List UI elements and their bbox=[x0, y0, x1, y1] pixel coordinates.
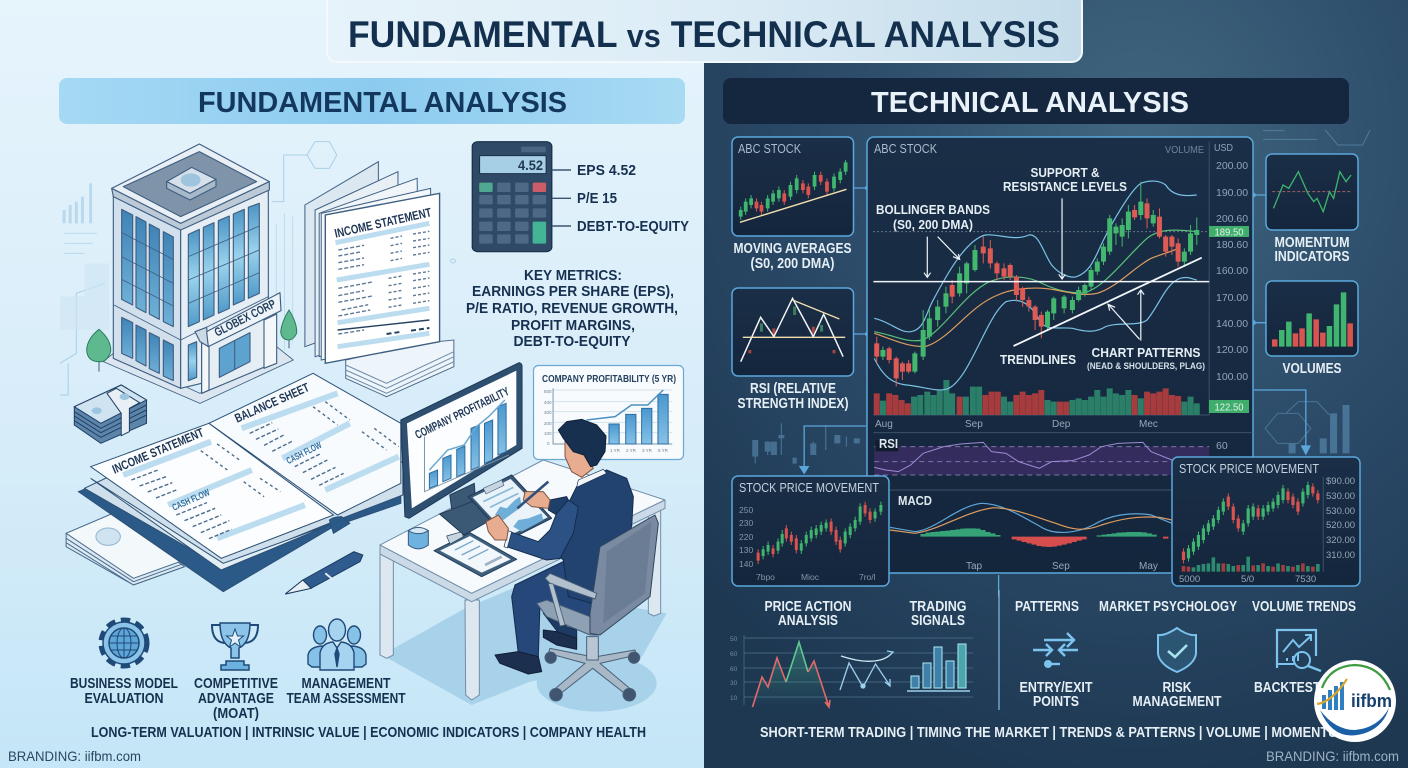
label: moving averages: (S0, 200 DMA) bbox=[750, 256, 835, 272]
head and shoulders pattern bbox=[741, 298, 845, 362]
card: company profitability 5 yr chart bbox=[534, 366, 684, 460]
label: market psychology: MARKET PSYCHOLOGY bbox=[1099, 598, 1237, 615]
bollinger bands bbox=[874, 181, 1197, 332]
icon: calculator bbox=[472, 142, 571, 252]
illustration: desktop monitor with profitability chart bbox=[401, 363, 522, 535]
card title: COMPANY PROFITABILITY (5 YR) bbox=[542, 373, 676, 385]
text block: key metrics bbox=[466, 267, 678, 350]
label: price action analysis: ANALYSIS bbox=[778, 612, 838, 629]
month axis labels: Aug bbox=[875, 419, 893, 430]
chair armrest bbox=[545, 573, 597, 599]
label: entry/exit points bbox=[1020, 679, 1092, 710]
axis labels: 7ro/l bbox=[859, 572, 876, 582]
volume and USD labels: VOLUME bbox=[1165, 144, 1204, 156]
text block: key metrics: EARNINGS PER SHARE (EPS), bbox=[472, 283, 674, 300]
label: RSI relative strength index bbox=[738, 381, 849, 412]
chart: price action line bbox=[730, 635, 973, 707]
price axis: 140.00 bbox=[1216, 318, 1248, 330]
text block: key metrics: PROFIT MARGINS, bbox=[511, 317, 635, 334]
card axis labels: 5 YR bbox=[658, 448, 669, 453]
price axis: 120.00 bbox=[1216, 344, 1248, 356]
label: entry/exit points: POINTS bbox=[1033, 693, 1079, 710]
floor shadow under desk and chair bbox=[382, 587, 667, 712]
background decoration: technical panel faded candles and hexagons bbox=[755, 130, 1370, 463]
illustration: analyst seated in office chair bbox=[468, 419, 658, 701]
text block: key metrics: KEY METRICS: bbox=[524, 267, 622, 284]
background decoration: faded bars and hexagon, left bbox=[60, 142, 456, 395]
RSI label: RSI bbox=[879, 436, 898, 451]
label: risk management: MANAGEMENT bbox=[1132, 693, 1222, 710]
metric: debt to equity: DEBT-TO-EQUITY bbox=[577, 218, 689, 235]
card axis labels: 400 bbox=[544, 400, 552, 405]
month axis labels: Sep bbox=[965, 419, 983, 430]
RSI band bbox=[874, 447, 1209, 475]
windows, left face bbox=[122, 209, 173, 381]
candle bodies bbox=[883, 202, 1197, 372]
chair base bbox=[545, 637, 640, 701]
icon: backtest chart and magnifier bbox=[1277, 630, 1321, 671]
annotation: chart patterns: (NEAD & SHOULDERS, PLAG) bbox=[1087, 361, 1205, 372]
support, dotted and trend lines bbox=[873, 281, 1209, 283]
label: trading signals: TRADING bbox=[910, 598, 966, 615]
label: trading signals: SIGNALS bbox=[911, 612, 965, 629]
chart: price action line: 30 bbox=[730, 680, 738, 687]
illustration: paper stack under income statement bbox=[346, 340, 454, 397]
illustration: income statement report bbox=[305, 162, 440, 363]
axis labels: $90.00 bbox=[1326, 476, 1355, 487]
price axis: 180.60 bbox=[1216, 239, 1248, 251]
axis labels: 130 bbox=[739, 545, 753, 555]
label: competitive advantage moat: ADVANTAGE bbox=[198, 690, 274, 707]
chart panel: RSI head and shoulders bbox=[732, 288, 854, 376]
card axis labels: 200 bbox=[544, 421, 552, 426]
label: moving averages bbox=[734, 241, 852, 272]
illustration: desk clipboard and glass bbox=[408, 527, 517, 577]
candle wicks bbox=[883, 182, 1197, 373]
month axis labels: Dep bbox=[1052, 419, 1071, 430]
card axis labels: 300 bbox=[544, 410, 552, 415]
axis labels: 320.00 bbox=[1326, 535, 1355, 546]
panel title: STOCK PRICE MOVEMENT bbox=[1179, 462, 1319, 476]
chart panel: stock price movement left bbox=[732, 476, 889, 586]
logo: iifbm: iifbm bbox=[1351, 691, 1392, 711]
icon: business model gear and globe bbox=[103, 622, 145, 664]
label: monitor chart title: COMPANY PROFITABILITY bbox=[413, 384, 511, 442]
chart panel: moving averages bbox=[732, 137, 854, 236]
label: volumes: VOLUMES bbox=[1282, 361, 1342, 377]
main chart label: ABC STOCK bbox=[874, 142, 938, 156]
panel: fundamental analysis background bbox=[0, 0, 704, 768]
mini candles and volume bbox=[1184, 477, 1323, 572]
label: competitive advantage moat: COMPETITIVE bbox=[194, 675, 278, 692]
chart panel: main ABC stock chart: USD bbox=[1214, 142, 1233, 154]
panel: technical analysis background bbox=[704, 0, 1408, 768]
neck and face bbox=[565, 440, 593, 477]
annotation: trendlines: TRENDLINES bbox=[1000, 352, 1076, 367]
icon: risk management shield bbox=[1158, 628, 1196, 672]
axis labels: 520.00 bbox=[1326, 520, 1355, 531]
label: book balance sheet: BALANCE SHEET bbox=[233, 380, 312, 426]
label: momentum indicators bbox=[1274, 235, 1350, 265]
annotation: bollinger bands bbox=[876, 202, 990, 232]
axis labels: 530.00 bbox=[1326, 506, 1355, 517]
tablet bbox=[468, 475, 552, 540]
label: Globex Corp sign: GLOBEX CORP bbox=[212, 297, 278, 339]
RSI axis value: 60 bbox=[1216, 440, 1228, 452]
icon: management team bbox=[308, 619, 366, 670]
label: patterns: PATTERNS bbox=[1015, 598, 1079, 615]
panel label: ABC STOCK bbox=[738, 142, 802, 156]
label: trading signals bbox=[910, 598, 966, 629]
axis labels: 230 bbox=[739, 518, 753, 528]
annotation: bollinger bands: (S0, 200 DMA) bbox=[893, 217, 973, 232]
mini candles bbox=[758, 502, 881, 564]
icon: pen bbox=[285, 552, 363, 594]
header: fundamental analysis bbox=[59, 78, 685, 124]
card axis labels: 100 bbox=[544, 431, 552, 436]
text block: key metrics: DEBT-TO-EQUITY bbox=[514, 333, 630, 350]
chart panel: momentum indicators bbox=[1266, 154, 1358, 230]
icon: entry/exit arrows bbox=[1033, 633, 1078, 668]
label: risk management bbox=[1132, 679, 1222, 710]
chart panel: volumes bbox=[1266, 281, 1358, 356]
illustration: paper stack bottom left bbox=[66, 513, 184, 585]
title bbox=[327, 0, 1082, 62]
chart: price action line: 60 bbox=[730, 666, 738, 673]
label: volume trends: VOLUME TRENDS bbox=[1252, 598, 1356, 615]
card axis labels: 3 YR bbox=[642, 448, 653, 453]
metric: EPS: EPS 4.52 bbox=[577, 162, 636, 179]
annotation: support and resistance: SUPPORT & bbox=[1030, 165, 1100, 180]
MACD lines and histogram bbox=[890, 503, 1172, 532]
building entrance bbox=[202, 310, 273, 393]
annotation: support and resistance: RESISTANCE LEVELS bbox=[1003, 179, 1127, 194]
label: business model evaluation: EVALUATION bbox=[84, 690, 164, 707]
axis labels: 220 bbox=[739, 532, 753, 542]
connector lines between technical panels bbox=[800, 186, 1310, 597]
label: management team assessment bbox=[286, 675, 406, 707]
price axis: 170.00 bbox=[1216, 292, 1248, 304]
green price tag 122.50: 122.50 bbox=[1214, 402, 1244, 414]
windows, right face bbox=[188, 203, 259, 381]
divider: technical bottom section bbox=[998, 590, 1000, 710]
chart: signal bars bbox=[907, 644, 970, 691]
illustration: Globex Corp office building bbox=[103, 144, 293, 403]
chart panel: stock price movement right bbox=[1172, 457, 1360, 586]
text block: key metrics: P/E RATIO, REVENUE GROWTH, bbox=[466, 300, 678, 317]
axis labels: 5000 bbox=[1179, 574, 1200, 585]
label: backtesting: BACKTESTING bbox=[1254, 679, 1342, 696]
axis labels bbox=[739, 505, 876, 582]
label: competitive advantage moat: (MOAT) bbox=[213, 705, 259, 722]
annotation: chart patterns bbox=[1087, 345, 1205, 372]
axis labels: 310.00 bbox=[1326, 550, 1355, 561]
axis labels: 7530 bbox=[1295, 574, 1316, 585]
MACD month axis bbox=[966, 561, 1158, 572]
annotation: support and resistance bbox=[1003, 165, 1127, 194]
footer: fundamental keywords: LONG-TERM VALUATION | INTRINSIC VALUE | ECONOMIC INDICATORS | COMPANY HEALTH bbox=[91, 724, 646, 741]
floor band bbox=[114, 297, 268, 340]
label: business model evaluation: BUSINESS MODEL bbox=[70, 675, 178, 692]
torso bbox=[557, 470, 633, 603]
annotation: bollinger bands: BOLLINGER BANDS bbox=[876, 202, 990, 217]
chart panel: main ABC stock chart bbox=[867, 137, 1253, 573]
near arm bbox=[507, 500, 578, 560]
branding right: BRANDING: iifbm.com bbox=[1266, 748, 1399, 764]
chair seat bbox=[537, 600, 600, 635]
chair back bbox=[590, 515, 658, 635]
label: momentum indicators: MOMENTUM bbox=[1274, 235, 1350, 251]
volume bars bbox=[1275, 292, 1350, 347]
label: management team assessment: MANAGEMENT bbox=[302, 675, 390, 692]
volume bars bbox=[877, 388, 1178, 415]
card axis labels bbox=[544, 389, 669, 453]
price axis: 100.00 bbox=[1216, 371, 1248, 383]
price axis: 190.00 bbox=[1216, 187, 1248, 199]
candlestick chart with bands, averages and volume bbox=[873, 142, 1253, 547]
MACD month axis: May bbox=[1139, 561, 1158, 572]
MACD label: MACD bbox=[898, 494, 932, 508]
month axis labels: Mec bbox=[1139, 419, 1158, 430]
price axis: 200.60 bbox=[1216, 213, 1248, 225]
illustration: open ledger book bbox=[78, 373, 403, 592]
axis labels bbox=[1179, 476, 1355, 585]
shoes bbox=[495, 630, 577, 674]
label: risk management: RISK bbox=[1162, 679, 1192, 696]
card axis labels: 0 bbox=[547, 441, 550, 446]
momentum line bbox=[1272, 172, 1352, 212]
label: competitive advantage moat bbox=[194, 675, 278, 722]
label: RSI relative strength index: RSI (RELATIVE bbox=[750, 381, 836, 397]
annotation arrows bbox=[924, 198, 1144, 341]
label: RSI relative strength index: STRENGTH INDEX) bbox=[738, 396, 849, 412]
label: book cash flow left: CASH FLOW bbox=[171, 487, 212, 514]
title: FUNDAMENTAL vs TECHNICAL ANALYSIS bbox=[348, 14, 1060, 55]
label: entry/exit points: ENTRY/EXIT bbox=[1020, 679, 1092, 696]
chart: price action line: 60 bbox=[730, 651, 738, 658]
chart: signal pattern bbox=[840, 651, 893, 690]
annotation: chart patterns: CHART PATTERNS bbox=[1092, 345, 1201, 360]
axis labels: 140 bbox=[739, 559, 753, 569]
card axis labels: 1 YR bbox=[610, 448, 621, 453]
header: technical analysis bbox=[723, 78, 1349, 124]
header: technical analysis: TECHNICAL ANALYSIS bbox=[871, 87, 1189, 119]
label: price action analysis: PRICE ACTION bbox=[764, 598, 852, 615]
price axis: 160.00 bbox=[1216, 265, 1248, 277]
icon: competitive advantage trophy bbox=[212, 623, 258, 670]
card bar chart bbox=[553, 388, 672, 444]
chart: price action line: 10 bbox=[730, 695, 738, 702]
icon: right tree bbox=[281, 310, 297, 348]
card axis labels: 2 YR bbox=[626, 448, 637, 453]
branding left: BRANDING: iifbm.com bbox=[8, 748, 141, 764]
header: fundamental analysis: FUNDAMENTAL ANALYSIS bbox=[198, 87, 567, 119]
green price tag 189.50: 189.50 bbox=[1214, 226, 1244, 238]
MACD month axis: Tap bbox=[966, 561, 983, 572]
axis labels: 7bpo bbox=[756, 572, 775, 582]
illustration: desk bbox=[380, 460, 665, 700]
trousers bbox=[512, 560, 595, 657]
label: book cash flow right: CASH FLOW bbox=[285, 440, 324, 467]
label: management team assessment: TEAM ASSESSMENT bbox=[286, 690, 406, 707]
label: price action analysis bbox=[764, 598, 852, 629]
label: moving averages: MOVING AVERAGES bbox=[734, 241, 852, 257]
far arm bbox=[548, 497, 572, 515]
axis labels: 530.00 bbox=[1326, 491, 1355, 502]
logo: iifbm bbox=[1314, 660, 1396, 742]
label: business model evaluation bbox=[70, 675, 178, 707]
price axis: 200.00 bbox=[1216, 160, 1248, 172]
price axis bbox=[1216, 160, 1248, 383]
metric: P/E: P/E 15 bbox=[577, 190, 617, 207]
axis labels: 5/0 bbox=[1241, 574, 1254, 585]
card axis labels: 500 bbox=[544, 389, 552, 394]
moving averages bbox=[874, 230, 1197, 341]
label: income statement title: INCOME STATEMENT bbox=[333, 205, 433, 241]
icon: left tree bbox=[87, 329, 111, 372]
panel title: STOCK PRICE MOVEMENT bbox=[739, 481, 879, 495]
mini candlestick chart bbox=[740, 160, 846, 222]
label: momentum indicators: INDICATORS bbox=[1274, 249, 1350, 265]
calculator display value: 4.52 bbox=[518, 157, 543, 173]
MACD month axis: Sep bbox=[1052, 561, 1070, 572]
hands and pen bbox=[523, 492, 550, 508]
axis labels: 250 bbox=[739, 505, 753, 515]
axis labels: Mioc bbox=[801, 572, 820, 582]
hair bbox=[558, 419, 606, 467]
icon: cash stack bbox=[74, 385, 147, 443]
chart: price action line: 50 bbox=[730, 636, 738, 643]
label: book income statement: INCOME STATEMENT bbox=[110, 425, 206, 477]
month axis labels bbox=[875, 419, 1158, 430]
